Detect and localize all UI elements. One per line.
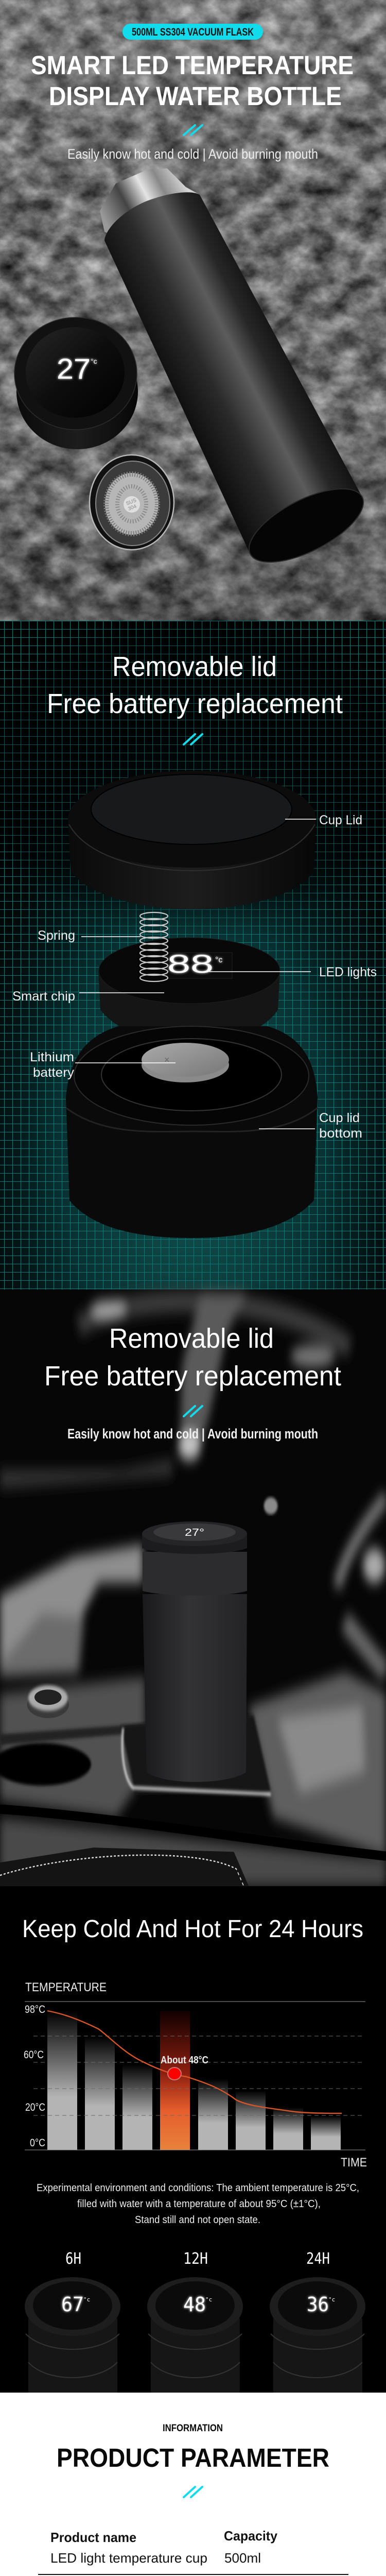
section: hero concrete background [0, 0, 386, 621]
callout: lithium battery [30, 1050, 176, 1080]
marker: about 48°C: About 48°C [161, 2055, 208, 2066]
bottle in cup holder: 27° [185, 1527, 204, 1538]
callout: spring: Spring [38, 928, 75, 943]
marker: about 48°C [161, 2055, 208, 2080]
strainer [90, 455, 174, 550]
icon: cyan double slash [184, 125, 202, 135]
LED module: 88 [167, 950, 214, 978]
subtitle: Easily know hot and cold | Avoid burning mouth [67, 146, 318, 162]
callout: lithium battery: battery [33, 1065, 75, 1080]
temperature curve [47, 2011, 342, 2113]
axis labels: 98°C [25, 2004, 45, 2015]
LED module: °c [215, 956, 222, 964]
parameter table: LED light temperature cup [50, 2550, 207, 2566]
test conditions note: Experimental environment and conditions: The ambient temperature is 25°C, [37, 2182, 359, 2194]
bottle readout: 6H: 67 [61, 2293, 84, 2316]
spring [140, 912, 168, 981]
heading: INFORMATION [163, 2423, 223, 2434]
axis labels: TEMPERATURE [25, 1980, 107, 1994]
lid with LED display [14, 317, 138, 449]
heading: PRODUCT PARAMETER [57, 2443, 329, 2472]
axis labels: 0°C [30, 2137, 45, 2149]
parameter table [38, 2528, 348, 2576]
heading: Keep Cold And Hot For 24 Hours [22, 1916, 363, 1943]
bottle readout: 24H: 24H [306, 2250, 330, 2268]
parameter table: Product name [50, 2530, 136, 2545]
bottle readout: 24H: °c [328, 2296, 335, 2303]
test conditions note: Stand still and not open state. [135, 2214, 260, 2226]
bottle readout: 12H: °c [205, 2296, 212, 2303]
icon: cyan double slash [184, 734, 202, 744]
bottle readout: 24H: 36 [307, 2293, 329, 2316]
bottle in cup holder [142, 1521, 247, 1782]
test conditions note [37, 2182, 359, 2226]
lithium battery: × [164, 1055, 170, 1065]
subtitle: Easily know hot and cold | Avoid burning mouth [67, 1426, 318, 1442]
section: car interior photo [0, 1290, 386, 1886]
callout: cup lid bottom: bottom [319, 1126, 362, 1141]
cup lid [68, 771, 316, 909]
callouts [12, 813, 377, 1141]
callout: LED lights: LED lights [319, 965, 377, 979]
LED module [98, 938, 280, 1043]
axis labels: 20°C [25, 2102, 45, 2113]
bottle readout: 12H [147, 2250, 243, 2393]
bottle readout: 6H: °c [83, 2296, 90, 2303]
section: product parameter [0, 2393, 386, 2576]
chart: temperature over time [24, 1980, 367, 2170]
cup lid bottom [66, 1026, 318, 1238]
callout: cup lid bottom: Cup lid [319, 1111, 360, 1125]
callout: cup lid: Cup Lid [319, 813, 362, 827]
heading [44, 1323, 341, 1392]
heading: Removable lid [109, 1323, 274, 1354]
lithium battery [142, 1043, 229, 1082]
car interior shapes [0, 1292, 386, 1886]
parameter table: 500ml [224, 2550, 261, 2566]
icon: cyan double slash [184, 1406, 202, 1416]
title: DISPLAY WATER BOTTLE [49, 81, 342, 111]
chart bars [47, 2011, 341, 2150]
callout: cup lid bottom [259, 1111, 362, 1141]
parameter table: Capacity [224, 2528, 278, 2544]
heading: Free battery replacement [47, 688, 343, 719]
bottle readout: 24H [270, 2250, 365, 2393]
axis labels [24, 1980, 367, 2170]
heading: Free battery replacement [44, 1361, 341, 1392]
test conditions note: filled with water with a temperature of about 95°C (±1°C), [77, 2198, 321, 2210]
callout: smart chip: Smart chip [12, 989, 75, 1004]
strainer: SUS [125, 498, 137, 507]
axis labels: 60°C [24, 2049, 44, 2061]
bottle [100, 168, 374, 577]
icon: cyan double slash [184, 2487, 202, 2497]
heading [57, 2423, 329, 2472]
title: SMART LED TEMPERATURE [31, 50, 354, 80]
section: black temperature panel [0, 1886, 386, 2393]
bottle readout: 12H: 48 [183, 2293, 206, 2316]
lid with LED display: 27 [57, 352, 91, 385]
title [31, 50, 354, 111]
strainer: 304 [127, 503, 137, 512]
title badge: 500ML SS304 VACUUM FLASK [132, 26, 254, 38]
heading [47, 651, 343, 719]
lid with LED display: °c [91, 357, 97, 365]
title badge [122, 24, 263, 40]
bottle readout: 12H: 12H [183, 2250, 208, 2268]
section: exploded lid on teal grid [0, 621, 386, 1290]
bottle readout: 6H: 6H [65, 2250, 81, 2268]
axis labels: TIME [341, 2156, 367, 2170]
bottle readout: 6H [25, 2250, 120, 2393]
callout: lithium battery: Lithium [30, 1050, 74, 1064]
heading: Removable lid [112, 651, 277, 682]
